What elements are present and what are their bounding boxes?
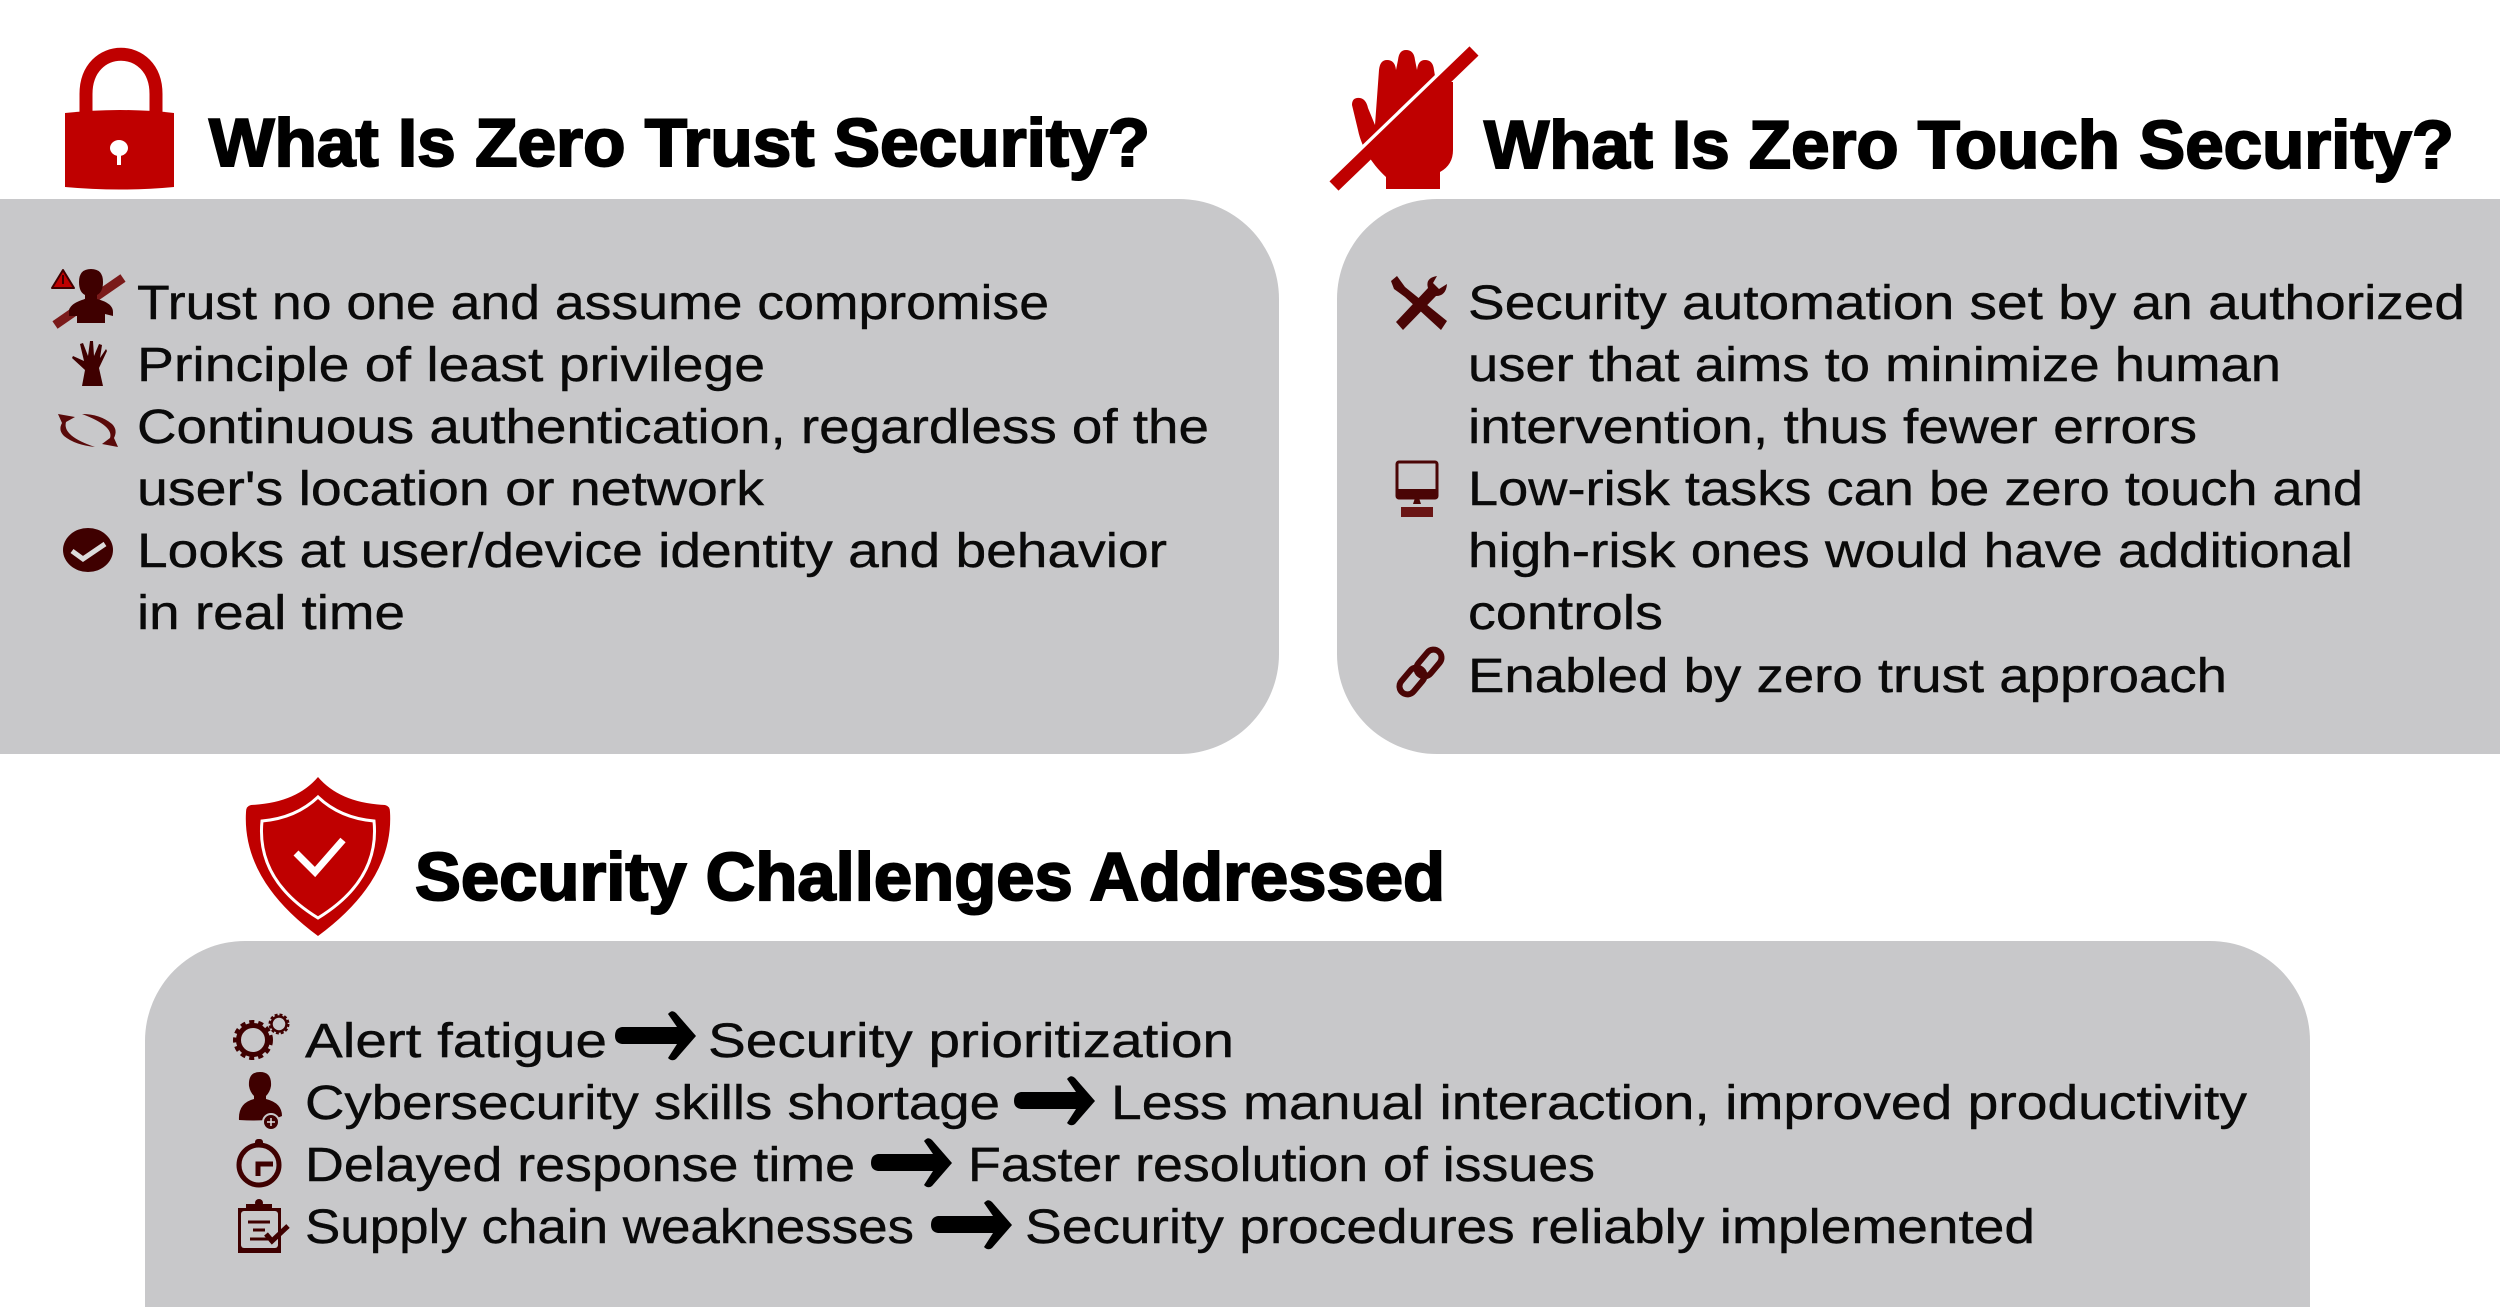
text: challenges: Less manual interaction, improved productivity <box>1111 1076 2248 1130</box>
icon: tools <box>1391 276 1447 330</box>
icon: gears <box>235 1014 288 1058</box>
text: challenges <box>305 1014 2248 1254</box>
text: zero trust points: Continuous authentication, regardless of the <box>137 400 1209 454</box>
panel: security challenges <box>145 941 2310 1307</box>
text: zero trust points: in real time <box>137 586 405 640</box>
text: zero trust points: Trust no one and assume compromise <box>137 276 1049 330</box>
icon: shield <box>246 777 390 936</box>
icon: add user <box>239 1072 282 1130</box>
text: challenges: Delayed response time <box>305 1138 855 1192</box>
text: zero touch points: Low-risk tasks can be zero touch and <box>1468 462 2363 516</box>
panel: zero touch <box>1337 199 2500 754</box>
text: zero touch points: Security automation set by an authorized <box>1468 276 2465 330</box>
icon: padlock <box>65 54 174 190</box>
arrow: row 1 <box>615 1011 696 1060</box>
icon: warning person <box>52 269 123 325</box>
text: challenges: Supply chain weaknesses <box>305 1200 914 1254</box>
text: zero trust points: user's location or network <box>137 462 765 516</box>
arrow: row 3 <box>871 1138 952 1187</box>
icon: check circle <box>63 528 113 572</box>
text: challenges: Security prioritization <box>708 1014 1234 1068</box>
icon: stopwatch <box>239 1139 279 1185</box>
icon: clipboard <box>238 1199 288 1253</box>
panel: zero trust <box>0 199 1279 754</box>
icon: hand <box>72 341 107 386</box>
text: zero touch points: Enabled by zero trust approach <box>1468 649 2227 703</box>
icon: crossed hand <box>1334 46 1474 189</box>
text: zero trust points: Looks at user/device identity and behavior <box>137 524 1167 578</box>
icon: computer <box>1396 462 1438 517</box>
text: zero trust points: Principle of least privilege <box>137 338 765 392</box>
arrow: row 4 <box>931 1200 1012 1249</box>
text: zero touch points: controls <box>1468 586 1663 640</box>
arrow: row 2 <box>1014 1076 1095 1125</box>
heading: zero touch: What Is Zero Touch Security? <box>1484 107 2454 183</box>
text: zero touch points: high-risk ones would have additional <box>1468 524 2353 578</box>
text: zero touch points: intervention, thus fewer errors <box>1468 400 2197 454</box>
text: zero touch points: user that aims to minimize human <box>1468 338 2281 392</box>
icon: chain link <box>1396 646 1445 698</box>
heading: zero trust: What Is Zero Trust Security? <box>209 105 1150 181</box>
text: challenges: Alert fatigue <box>305 1014 607 1068</box>
text: challenges: Faster resolution of issues <box>968 1138 1595 1192</box>
text: zero trust points <box>137 276 1209 640</box>
icon: rotating arrows <box>58 414 118 447</box>
heading: security challenges: Security Challenges Addressed <box>415 839 1445 915</box>
text: zero touch points <box>1468 276 2465 703</box>
text: challenges: Security procedures reliably implemented <box>1025 1200 2035 1254</box>
text: challenges: Cybersecurity skills shortage <box>305 1076 1000 1130</box>
